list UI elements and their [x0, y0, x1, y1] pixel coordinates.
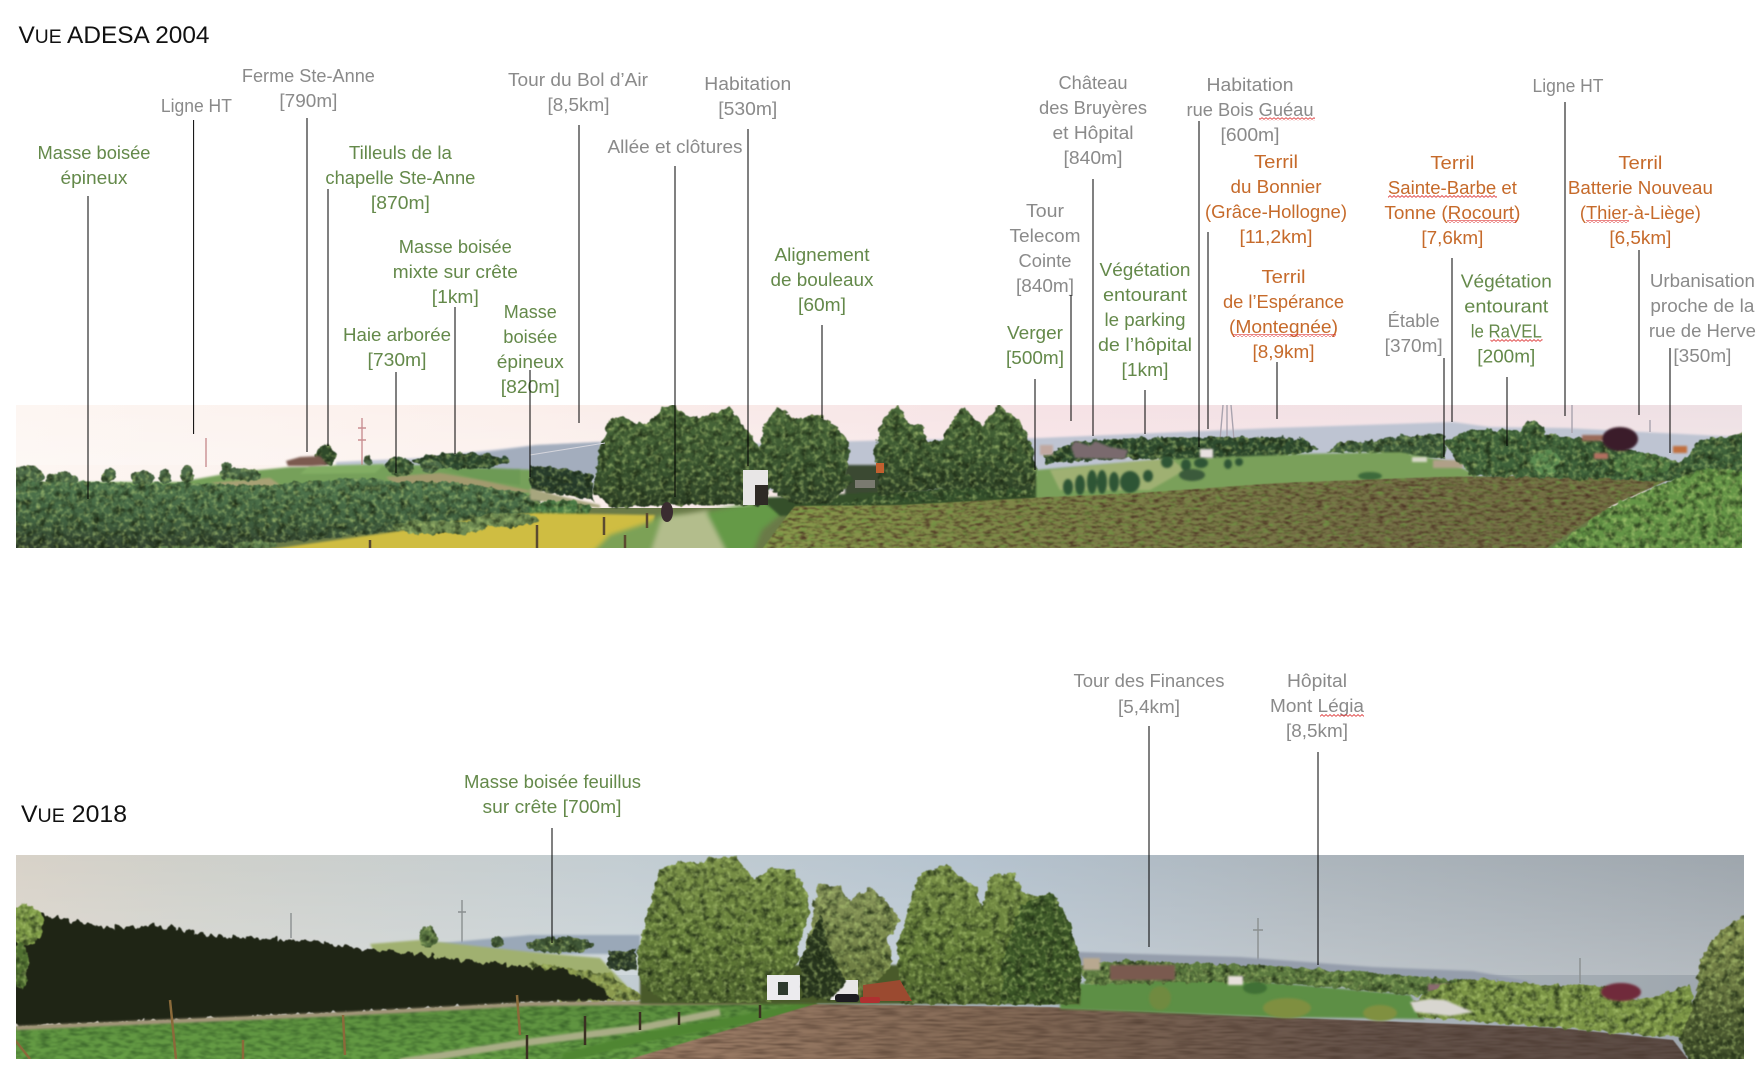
- backdrop behind big trees 2018: [640, 965, 1080, 1004]
- label text: [497, 302, 564, 397]
- label text: Végétation: [1100, 260, 1190, 280]
- label text: [11,2km]: [1240, 227, 1312, 247]
- leader line: [1198, 121, 1200, 447]
- leader line: [327, 189, 329, 446]
- fence posts 2018: [15, 995, 760, 1059]
- sky 2004: [16, 405, 1742, 508]
- conifer mass 2004: [10, 478, 540, 553]
- label text: [530m]: [718, 99, 777, 119]
- roofs and dark red tree: [1582, 427, 1687, 459]
- crest meadow 2018: [370, 940, 640, 1000]
- callout: Masse boisée mixte sur crête: [393, 237, 518, 454]
- leader line: [674, 166, 676, 497]
- label text: Tilleuls de la: [349, 143, 453, 163]
- label text: [1km]: [1122, 360, 1168, 380]
- label text: Terril: [1254, 152, 1298, 172]
- label text: Alignement: [774, 245, 870, 265]
- callout: Étable: [1385, 311, 1444, 457]
- label text: [350m]: [1673, 346, 1731, 366]
- label text: [1205, 152, 1347, 247]
- label text: [1649, 271, 1756, 366]
- label text: Habitation: [704, 74, 791, 94]
- leader line: [1144, 390, 1146, 434]
- label text: [500m]: [1006, 348, 1064, 368]
- label text: chapelle Ste-Anne: [325, 168, 475, 188]
- leader line: [1070, 295, 1072, 421]
- white house 2004: [743, 463, 884, 505]
- label text: épineux: [497, 352, 564, 372]
- label text: Étable: [1388, 311, 1440, 331]
- big trees 2018: [637, 857, 1082, 1004]
- label text: Tour: [1026, 201, 1064, 221]
- fence posts 2004: [370, 513, 647, 548]
- far hills 2018: [420, 935, 1533, 985]
- label text: [38, 143, 150, 188]
- leader line: [551, 828, 553, 943]
- leader line: [747, 129, 749, 466]
- grass verge: [593, 496, 780, 548]
- pylons 2004: [206, 405, 1650, 467]
- label text: [1074, 671, 1224, 717]
- label text: [870m]: [371, 193, 430, 213]
- right bushes 2018: [1410, 978, 1700, 1037]
- label text: Sainte-Barbe et: [1388, 178, 1517, 198]
- label text: [840m]: [1016, 276, 1074, 296]
- callout: Tour du Bol d'Air: [508, 70, 648, 423]
- leader line: [1443, 358, 1445, 457]
- panel: panorama photo 2018: [7, 855, 1750, 1065]
- farm Ste-Anne: [286, 456, 328, 466]
- callout: Masse boisée épineux 820m: [497, 302, 564, 477]
- label text: Haie arborée: [343, 325, 451, 345]
- callout: Habitation rue Bois Guéau: [1186, 75, 1315, 447]
- white shed 2018: [1410, 999, 1473, 1016]
- leader line: [306, 118, 308, 452]
- hedge 2004: [823, 488, 1032, 506]
- right grass bank: [1551, 468, 1742, 548]
- leader line: [395, 372, 397, 473]
- label text: Ligne HT: [161, 96, 232, 116]
- house, barn and cars 2018: [767, 975, 912, 1003]
- leader line: [529, 370, 531, 477]
- label text: Ferme Ste-Anne: [242, 66, 375, 86]
- label text: [1010, 201, 1080, 296]
- title: Vue 2018: VUE 2018: [21, 801, 127, 828]
- label text: [1270, 671, 1365, 741]
- callout: Habitation 530m: [704, 74, 791, 466]
- label text: [393, 237, 518, 307]
- panel: panorama photo 2004: [8, 405, 1750, 556]
- label text: Tour des Finances: [1074, 671, 1224, 691]
- meadow 2004: [1036, 452, 1480, 500]
- label text: [6,5km]: [1609, 228, 1671, 248]
- label text: [840m]: [1064, 148, 1122, 168]
- crest wood 2018: [418, 927, 636, 970]
- callout: Alignement de bouleaux: [770, 245, 874, 418]
- label text: Terril: [1618, 153, 1662, 173]
- red tree 2018: [1601, 983, 1641, 1001]
- label text: Tonne (Rocourt): [1384, 203, 1520, 223]
- distant hills 2004: [336, 422, 1741, 490]
- label text: Masse boisée: [38, 143, 150, 163]
- label text: [820m]: [501, 377, 560, 397]
- label text: [325, 143, 475, 213]
- yellow field: [271, 512, 656, 548]
- label text: entourant: [1103, 285, 1187, 305]
- callout: Tour Telecom Cointe: [1010, 201, 1080, 421]
- callout: Terril Batterie Nouveau: [1568, 153, 1713, 415]
- callout: Végétation parking de l'hôpital: [1098, 260, 1192, 434]
- label text: Masse: [504, 302, 557, 322]
- label text: Ligne HT: [1532, 76, 1604, 96]
- ground base 2004: [266, 508, 1612, 548]
- label text: entourant: [1464, 296, 1548, 316]
- label text: [200m]: [1477, 346, 1535, 366]
- label text: [8,5km]: [1286, 721, 1348, 741]
- label text: Cointe: [1018, 251, 1072, 271]
- big trees 2004: [593, 405, 1040, 508]
- callout: Masse boisée feuillus: [464, 772, 641, 943]
- leader line: [1207, 232, 1209, 429]
- label text: [1385, 311, 1443, 356]
- dark conifer by house 2018: [800, 913, 845, 1000]
- label text: [8,5km]: [548, 95, 610, 115]
- label text: [242, 66, 375, 111]
- orchard trees: [1063, 456, 1382, 495]
- label text: [7,6km]: [1421, 228, 1483, 248]
- callout: Tilleuls de la chapelle Ste-Anne: [325, 143, 475, 446]
- callout: Terril Sainte-Barbe et Tonne: [1384, 153, 1520, 422]
- title: Vue ADESA 2004: VUE ADESA 2004: [18, 22, 210, 49]
- label text: Terril: [1262, 267, 1306, 287]
- callout: Végétation entourant le RaVEL: [1461, 272, 1552, 446]
- leader line: [1451, 258, 1453, 422]
- label text: et Hôpital: [1052, 123, 1134, 143]
- label text: [464, 772, 641, 817]
- label text: du Bonnier: [1230, 177, 1322, 197]
- label text: [1568, 153, 1713, 248]
- callout: Masse boisée épineux: [38, 143, 150, 499]
- callout: Haie arborée: [343, 325, 451, 473]
- label text: le parking: [1104, 310, 1186, 330]
- label text: [1384, 153, 1520, 248]
- label text: (Thier-à-Liège): [1580, 203, 1701, 223]
- label text: [1223, 267, 1344, 362]
- callout: Ferme Ste-Anne: [242, 66, 375, 452]
- field 2004: [760, 475, 1673, 552]
- label text: de l’hôpital: [1098, 335, 1192, 355]
- leader line: [1506, 377, 1508, 446]
- label text: [5,4km]: [1118, 697, 1180, 717]
- leader line: [1317, 752, 1319, 965]
- label text: [730m]: [368, 350, 426, 370]
- crest woods and hedge trees: [8, 445, 509, 486]
- château and buildings: [1040, 441, 1463, 468]
- leader line: [1092, 179, 1094, 436]
- label text: sur crête [700m]: [482, 797, 622, 817]
- backdrop behind big trees: [760, 465, 1048, 516]
- leader line: [193, 120, 195, 434]
- leader line: [1564, 102, 1566, 416]
- ploughed field 2018: [620, 1004, 1690, 1062]
- label text: [704, 74, 791, 119]
- label text: Habitation: [1206, 75, 1294, 95]
- leader line: [1669, 348, 1671, 453]
- label text: [1039, 73, 1147, 168]
- label text: Batterie Nouveau: [1568, 178, 1713, 198]
- leader line: [821, 325, 823, 418]
- olive bank: [530, 962, 650, 1003]
- leader line: [87, 196, 89, 499]
- leader line: [1638, 250, 1640, 415]
- label text: Tour du Bol d’Air: [508, 70, 648, 90]
- label text: rue Bois Guéau: [1186, 100, 1314, 120]
- pylons 2018: [291, 900, 1580, 983]
- label text: Urbanisation: [1650, 271, 1755, 291]
- label text: Masse boisée: [399, 237, 512, 257]
- label text: de l’Espérance: [1223, 292, 1344, 312]
- label text: (Montegnée): [1229, 317, 1338, 337]
- label text: [1186, 75, 1315, 145]
- power line: [530, 443, 605, 455]
- callout: Terril de l'Espérance: [1223, 267, 1344, 419]
- callout: Hôpital Mont Légia: [1270, 671, 1365, 965]
- label text: Allée et clôtures: [608, 137, 742, 157]
- label text: [770, 245, 874, 315]
- label text: [1098, 260, 1192, 380]
- label text: [1006, 323, 1064, 368]
- label text: proche de la: [1650, 296, 1755, 316]
- village tree band 2018: [1080, 960, 1465, 1002]
- label text: [60m]: [798, 295, 846, 315]
- meadow with track 2018: [10, 1001, 817, 1065]
- label text: Verger: [1007, 323, 1063, 343]
- label text: [1461, 272, 1552, 366]
- label text: [508, 70, 648, 115]
- leader line: [1276, 362, 1278, 419]
- leader line: [454, 307, 456, 454]
- sky 2018: [16, 855, 1744, 1059]
- conifer mass 2018: [10, 907, 613, 1027]
- label text: Végétation: [1461, 272, 1552, 292]
- label text: (Grâce-Hollogne): [1205, 202, 1347, 222]
- callout: Tour des Finances: [1074, 671, 1224, 947]
- label text: le RaVEL: [1471, 322, 1542, 342]
- horse: [661, 502, 673, 522]
- callout: Urbanisation proche de la rue de Herve: [1649, 271, 1756, 453]
- label text: mixte sur crête: [393, 262, 518, 282]
- light foliage at left edge: [16, 902, 45, 990]
- label text: boisée: [503, 327, 557, 347]
- label text: Mont Légia: [1270, 696, 1365, 716]
- dark wood and slope: [528, 466, 600, 520]
- label text: [370m]: [1385, 336, 1443, 356]
- label text: [600m]: [1220, 125, 1280, 145]
- valley meadow 2018: [1060, 977, 1425, 1019]
- label text: des Bruyères: [1039, 98, 1147, 118]
- label text: [343, 325, 451, 370]
- label text: Telecom: [1010, 226, 1080, 246]
- callout: Château des Bruyères et Hôpital: [1039, 73, 1147, 436]
- right tree mass 2004: [1443, 422, 1750, 480]
- buildings 2018: [1083, 958, 1450, 991]
- leader line: [1034, 379, 1036, 470]
- label text: [8,9km]: [1252, 342, 1314, 362]
- leader line: [578, 125, 580, 423]
- bushes on yellow field: [140, 513, 539, 552]
- big bush right 2018: [1680, 913, 1750, 1065]
- treeline 2004: [1045, 434, 1445, 464]
- meadow bushes 2018: [1149, 982, 1397, 1021]
- fields behind conifers: [16, 464, 536, 500]
- label text: [790m]: [279, 91, 337, 111]
- label text: de bouleaux: [770, 270, 874, 290]
- leader line: [1148, 726, 1150, 947]
- label text: épineux: [60, 168, 128, 188]
- callout: Verger: [1006, 323, 1064, 470]
- label text: Château: [1058, 73, 1128, 93]
- label text: rue de Herve: [1649, 321, 1756, 341]
- label text: Masse boisée feuillus: [464, 772, 641, 792]
- label text: [1km]: [432, 287, 479, 307]
- label text: Hôpital: [1287, 671, 1347, 691]
- callout: Terril du Bonnier: [1205, 152, 1347, 429]
- label text: Terril: [1430, 153, 1474, 173]
